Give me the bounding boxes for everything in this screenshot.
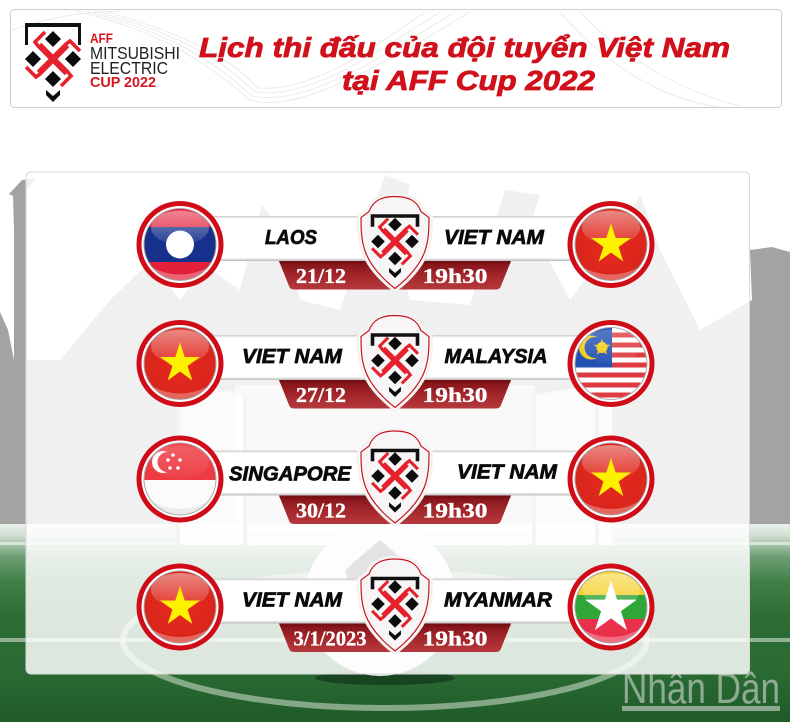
title — [199, 32, 730, 96]
date and time tab — [279, 624, 511, 652]
match 2: Viet Nam vs Malaysia — [136, 314, 654, 410]
AFF logo wordmark: MITSUBISHI — [90, 43, 180, 63]
title: Lịch thi đấu của đội tuyển Việt Nam — [199, 32, 730, 63]
goal and net — [178, 385, 612, 545]
home team: SINGAPORE — [229, 464, 352, 486]
flag: Viet Nam — [568, 436, 654, 522]
flag: Viet Nam — [136, 564, 224, 650]
shield emblem — [358, 557, 432, 654]
AFF logo wordmark — [90, 31, 180, 91]
header panel — [10, 10, 782, 108]
score bar — [205, 578, 585, 624]
AFF logo wordmark: AFF — [90, 31, 113, 46]
pitch — [0, 515, 790, 722]
score bar — [205, 335, 585, 380]
flag: Malaysia — [568, 320, 654, 407]
crowd silhouettes — [0, 175, 790, 524]
shield emblem — [358, 314, 432, 410]
match 3: Singapore vs Viet Nam — [136, 429, 654, 526]
football — [304, 524, 456, 676]
flag: Myanmar — [568, 564, 654, 650]
date: 27/12 — [296, 383, 346, 407]
match 1: Laos vs Viet Nam — [136, 194, 654, 292]
AFF logo wordmark: CUP 2022 — [90, 75, 156, 91]
date and time tab — [279, 261, 511, 290]
flag: Viet Nam — [136, 320, 224, 407]
date: 3/1/2023 — [294, 626, 366, 650]
home team: VIET NAM — [242, 590, 343, 612]
date: 30/12 — [296, 498, 346, 522]
date and time tab — [279, 380, 511, 408]
score bar — [205, 216, 585, 261]
panel: match list background — [26, 172, 750, 674]
flag: Viet Nam — [568, 201, 654, 288]
away team: MYANMAR — [444, 590, 553, 612]
AFF logo wordmark: ELECTRIC — [90, 58, 168, 78]
away team: MALAYSIA — [444, 346, 548, 368]
date: 21/12 — [296, 264, 346, 288]
home team: VIET NAM — [242, 346, 343, 368]
away team: VIET NAM — [457, 462, 558, 484]
score bar — [205, 450, 585, 496]
away team: VIET NAM — [444, 227, 545, 249]
match 4: Viet Nam vs Myanmar — [136, 557, 654, 654]
flag: Singapore — [136, 436, 224, 522]
flag: Laos — [136, 201, 224, 288]
date and time tab — [279, 496, 511, 524]
kick-off time: 19h30 — [422, 264, 488, 288]
decorative wave — [12, 11, 740, 107]
home team: LAOS — [265, 227, 318, 249]
AFF logo mark — [25, 23, 81, 102]
shield emblem — [358, 194, 432, 292]
shield emblem — [358, 429, 432, 526]
kick-off time: 19h30 — [422, 383, 488, 407]
title: tại AFF Cup 2022 — [342, 65, 595, 96]
kick-off time: 19h30 — [422, 626, 488, 650]
kick-off time: 19h30 — [422, 498, 488, 522]
